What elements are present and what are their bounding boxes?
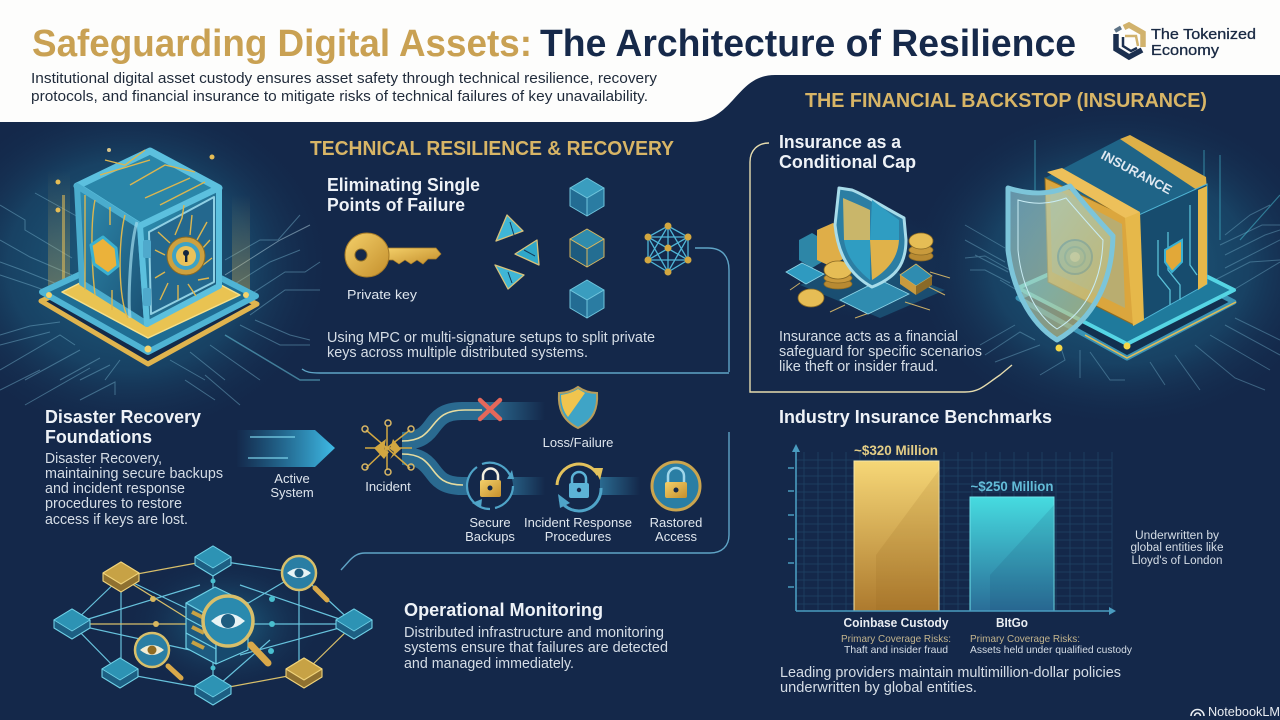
note: underwriters: Underwritten by — [1135, 530, 1219, 542]
title: Safeguarding Digital Assets: — [32, 23, 532, 65]
heading: technical resilience: TECHNICAL RESILIENCE & RECOVERY — [310, 138, 675, 160]
description: benchmarks: Leading providers maintain multimillion-dollar policies — [780, 665, 1121, 681]
panel: insurance as conditional cap — [750, 132, 1012, 392]
label: active system: Active — [274, 471, 310, 486]
text block: operational monitoring: Operational Monitoring — [404, 600, 603, 620]
logo: The Tokenized Economy: Economy — [1151, 43, 1220, 59]
text block: operational monitoring: systems ensure that failures are detected — [404, 640, 668, 656]
chart grid — [796, 452, 1112, 611]
description: MPC: keys across multiple distributed systems. — [327, 345, 588, 361]
label: restored access: Rastored — [650, 515, 702, 530]
text block: operational monitoring: and managed immediately. — [404, 656, 574, 672]
network links — [72, 560, 354, 690]
label: loss/failure: Loss/Failure — [543, 435, 613, 450]
note: Coinbase risks — [841, 633, 951, 656]
label: secure backups: Backups — [465, 529, 515, 544]
text block: disaster recovery: Disaster Recovery — [45, 407, 201, 427]
insurance label: INSURANCE — [1099, 147, 1175, 197]
bar chart: insurance benchmarks — [788, 442, 1133, 656]
icon: restored access — [652, 462, 700, 510]
label: secure backups — [465, 515, 515, 544]
note: BitGo risks — [970, 633, 1133, 656]
icon: loss shield — [559, 387, 597, 428]
label: incident response — [524, 515, 632, 544]
value: BitGo: ~$250 Million — [970, 478, 1054, 494]
server stack — [186, 587, 248, 664]
label: restored access — [650, 515, 702, 544]
description: insurance: like theft or insider fraud. — [779, 359, 938, 375]
safe body — [1045, 139, 1205, 220]
subtitle — [31, 70, 658, 105]
note: underwriters — [1130, 530, 1224, 567]
panel border — [750, 143, 1012, 392]
logo: The Tokenized Economy — [1115, 25, 1256, 59]
subtitle: Institutional digital asset custody ensures asset safety through technical resilience, recovery — [31, 70, 658, 87]
value: Coinbase: ~$320 Million — [854, 442, 938, 458]
icon: private key — [345, 233, 441, 277]
arrow: active system — [236, 430, 335, 467]
panel: private key split — [302, 175, 729, 373]
door — [149, 197, 214, 314]
icon: MPC node network — [644, 222, 692, 276]
label: incident response: Procedures — [545, 529, 612, 544]
text block: operational monitoring: Distributed infrastructure and monitoring — [404, 625, 664, 641]
label: Coinbase Custody: Coinbase Custody — [844, 616, 949, 630]
logo: The Tokenized Economy: The Tokenized — [1151, 27, 1256, 43]
heading: eliminating single points: Eliminating Single — [327, 175, 480, 195]
description: benchmarks — [780, 665, 1121, 696]
label: incident response: Incident Response — [524, 515, 632, 530]
illustration: monitoring network — [54, 546, 372, 705]
header band — [0, 0, 1280, 122]
title: The Architecture of Resilience — [540, 23, 1076, 65]
panel border — [341, 432, 729, 570]
gold light rays — [48, 170, 70, 300]
branch paths — [402, 402, 640, 495]
text block: disaster recovery: maintaining secure backups — [45, 466, 223, 482]
description: insurance: safeguard for specific scenarios — [779, 344, 982, 360]
panel border — [302, 248, 729, 373]
text block: operational monitoring — [404, 600, 668, 672]
note: Coinbase risks: Thaft and insider fraud — [844, 644, 948, 656]
description: MPC — [327, 330, 655, 361]
description: MPC: Using MPC or multi-signature setups to split private — [327, 330, 655, 346]
description: benchmarks: underwritten by global entities. — [780, 680, 977, 696]
chart axes — [788, 444, 1116, 615]
text block: disaster recovery: procedures to restore — [45, 496, 182, 512]
text block: disaster recovery: access if keys are lost. — [45, 512, 188, 528]
dial — [1058, 240, 1092, 274]
lock dial — [167, 237, 205, 275]
illustration: shield and coins — [780, 188, 960, 325]
platform — [41, 254, 257, 364]
label: active system: System — [270, 485, 314, 500]
note: BitGo risks: Assets held under qualified custody — [970, 644, 1133, 656]
icon: secure backups — [467, 463, 514, 509]
icon: failure cross — [480, 400, 500, 419]
heading: insurance cap — [779, 132, 916, 172]
illustration: insurance vault — [965, 135, 1280, 390]
bar: BitGo — [970, 497, 1054, 611]
description: insurance: Insurance acts as a financial — [779, 329, 958, 345]
label: restored access: Access — [655, 529, 697, 544]
description: insurance — [779, 329, 982, 375]
text block: disaster recovery: and incident response — [45, 481, 185, 497]
text block: disaster recovery — [45, 407, 223, 528]
bar: Coinbase — [854, 461, 939, 611]
illustration: circuit vault — [0, 148, 320, 405]
text block: disaster recovery: Foundations — [45, 427, 152, 447]
circuit traces around insurance vault — [965, 205, 1280, 390]
circuit traces around vault — [0, 193, 320, 405]
note: BitGo risks: Primary Coverage Risks: — [970, 633, 1080, 645]
glass shield — [1008, 186, 1113, 340]
label: active system — [270, 471, 314, 500]
label: BitGo: BItGo — [996, 616, 1028, 630]
cube body — [77, 151, 219, 226]
heading: the financial backstop: THE FINANCIAL BACKSTOP (INSURANCE) — [805, 90, 1207, 112]
note: underwriters: Lloyd's of London — [1132, 555, 1222, 567]
watermark: NotebookLM: NotebookLM — [1208, 705, 1280, 719]
gold circuitry — [85, 150, 212, 318]
vault glow right — [905, 100, 1280, 430]
heading: industry benchmarks: Industry Insurance Benchmarks — [779, 407, 1052, 427]
label: incident: Incident — [365, 479, 411, 494]
label: secure backups: Secure — [469, 515, 511, 530]
vault glow left — [0, 90, 335, 440]
flow: recovery process — [236, 387, 729, 570]
subtitle: protocols, and financial insurance to mitigate risks of technical failures of key unavailability. — [31, 88, 648, 105]
heading: eliminating single points — [327, 175, 480, 215]
note: Coinbase risks: Primary Coverage Risks: — [841, 633, 951, 645]
network nodes — [54, 546, 372, 705]
platform — [1018, 248, 1234, 358]
icon: incident response — [557, 464, 603, 511]
icon: key shards — [495, 215, 539, 289]
shield badge — [91, 237, 118, 274]
note: underwriters: global entities like — [1130, 542, 1224, 554]
magnifier: small left — [135, 633, 181, 678]
icon: distributed cubes — [570, 178, 604, 318]
magnifier: main — [203, 596, 268, 663]
heading: eliminating single points: Points of Failure — [327, 195, 465, 215]
text block: disaster recovery: Disaster Recovery, — [45, 451, 162, 467]
magnifier: top right — [282, 556, 327, 600]
label: private key: Private key — [347, 287, 418, 302]
heading: insurance cap: Conditional Cap — [779, 152, 916, 172]
icon: incident — [362, 420, 414, 475]
heading: insurance cap: Insurance as a — [779, 132, 902, 152]
